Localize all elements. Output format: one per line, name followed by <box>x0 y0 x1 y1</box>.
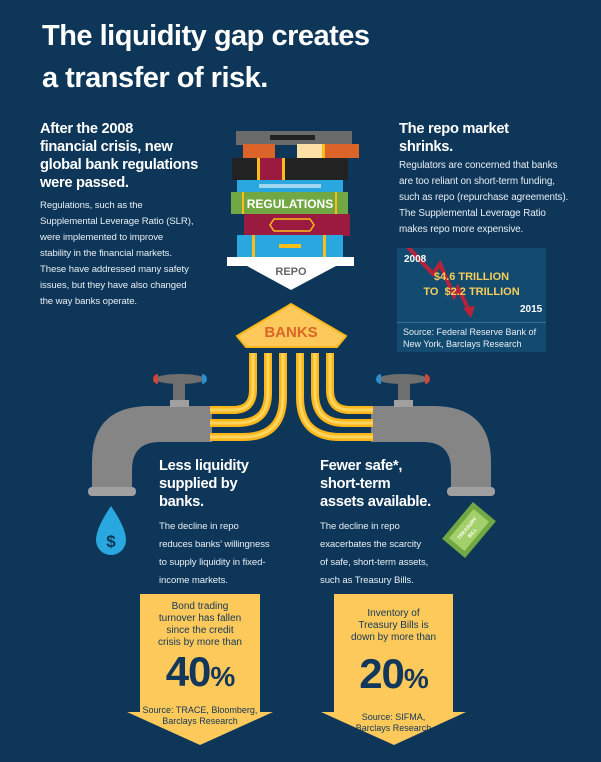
mid-right heading <box>320 458 431 510</box>
icon: treasury bill <box>442 502 496 558</box>
arrow: treasury <box>321 594 466 745</box>
callout: 40% <box>143 601 257 726</box>
mid-left body: to supply liquidity in fixed- <box>159 557 265 568</box>
banks roof: BANKS <box>264 324 318 341</box>
icon: dollar drop <box>96 506 126 555</box>
left heading: After the 2008 <box>40 121 133 137</box>
callout: 20%: down by more than <box>351 632 436 643</box>
icon: dollar drop: $ <box>106 532 116 551</box>
mid-right body: such as Treasury Bills. <box>320 575 414 586</box>
mid-left body <box>159 521 270 586</box>
mid-right body <box>320 521 428 586</box>
right heading <box>399 121 509 155</box>
pipes and faucets <box>88 353 495 496</box>
callout: 40%: Bond trading <box>172 601 228 612</box>
repo chart: 2008 <box>404 254 426 265</box>
icon: book stack: REGULATIONS <box>247 197 333 211</box>
callout: 40%: Source: TRACE, Bloomberg, <box>143 705 257 715</box>
left heading <box>40 121 198 191</box>
title <box>42 20 370 94</box>
left heading: financial crisis, new <box>40 139 172 155</box>
repo chart: 2015 <box>520 304 542 315</box>
title: The liquidity gap creates <box>42 20 370 52</box>
callout: 20%: Barclays Research <box>356 723 431 733</box>
left body text: issues, but they have also changed <box>40 280 186 291</box>
icon: book stack <box>231 131 359 257</box>
callout: 40%: since the credit <box>166 625 234 636</box>
mid-left heading: banks. <box>159 494 204 510</box>
repo chart: New York, Barclays Research <box>403 339 522 349</box>
mid-left heading: supplied by <box>159 476 237 492</box>
mid-left heading <box>159 458 249 510</box>
right heading: shrinks. <box>399 139 453 155</box>
icon: treasury bill: BILL <box>467 527 479 539</box>
left heading: global bank regulations <box>40 157 198 173</box>
callout: 40%: crisis by more than <box>158 637 242 648</box>
mid-right body: of safe, short-term assets, <box>320 557 428 568</box>
callout: 40%: 40% <box>166 648 234 695</box>
arrow: repo: REPO <box>275 266 307 278</box>
callout: 20% <box>351 608 436 733</box>
callout: 20%: Source: SIFMA, <box>362 712 425 722</box>
mid-right body: The decline in repo <box>320 521 400 532</box>
left body text: were implemented to improve <box>40 232 163 243</box>
left body text: These have addressed many safety <box>40 264 189 275</box>
right body text: are too reliant on short-term funding, <box>399 176 555 187</box>
right body text <box>399 160 568 235</box>
mid-left heading: Less liquidity <box>159 458 249 474</box>
callout: 20%: 20% <box>359 650 428 697</box>
mid-left body: reduces banks’ willingness <box>159 539 270 550</box>
left body text: the way banks operate. <box>40 296 137 307</box>
callout: 40%: turnover has fallen <box>159 613 241 624</box>
left body text: Supplemental Leverage Ratio (SLR), <box>40 216 193 227</box>
mid-left body: income markets. <box>159 575 228 586</box>
mid-right heading: Fewer safe*, <box>320 458 402 474</box>
title: a transfer of risk. <box>42 62 268 94</box>
left body text: stability in the financial markets. <box>40 248 172 259</box>
left heading: were passed. <box>40 175 129 191</box>
callout: 20%: Inventory of <box>367 608 420 619</box>
callout: 40%: Barclays Research <box>162 716 238 726</box>
mid-left body: The decline in repo <box>159 521 239 532</box>
mid-right heading: assets available. <box>320 494 431 510</box>
mid-right heading: short-term <box>320 476 390 492</box>
icon: treasury bill: TREASURY <box>456 516 479 541</box>
arrow: bond trading <box>127 594 273 745</box>
repo chart: TO $2.2 TRILLION <box>423 286 520 298</box>
repo chart <box>397 248 546 352</box>
left body text: Regulations, such as the <box>40 200 143 211</box>
right body text: Regulators are concerned that banks <box>399 160 557 171</box>
mid-right body: exacerbates the scarcity <box>320 539 421 550</box>
left body text <box>40 200 193 307</box>
repo chart: $4.6 TRILLION <box>434 271 509 283</box>
arrow: repo <box>227 257 354 290</box>
right heading: The repo market <box>399 121 509 137</box>
right body text: makes repo more expensive. <box>399 224 523 235</box>
banks roof <box>237 304 346 347</box>
right body text: The Supplemental Leverage Ratio <box>399 208 546 219</box>
right body text: such as repo (repurchase agreements). <box>399 192 568 203</box>
callout: 20%: Treasury Bills is <box>358 620 429 631</box>
repo chart: Source: Federal Reserve Bank of <box>403 327 536 337</box>
